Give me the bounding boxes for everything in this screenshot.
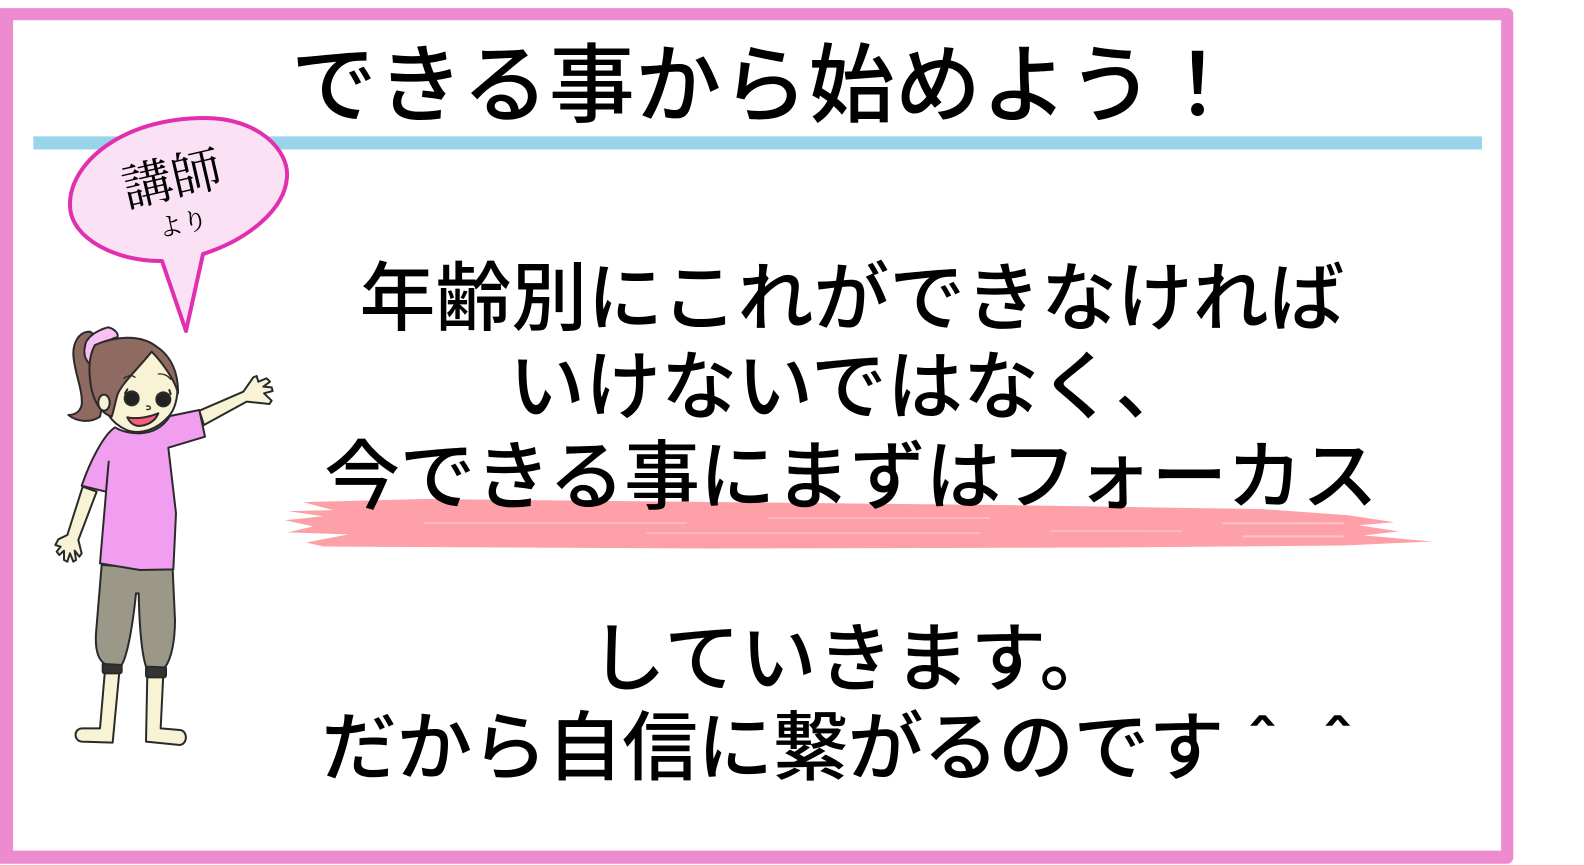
speech bubble: from the instructor <box>70 118 287 331</box>
illustration: knee bands <box>103 663 166 677</box>
illustration: hair <box>89 338 178 417</box>
speech bubble: from the instructor: より <box>156 207 210 243</box>
message line 4: していきます。 <box>590 617 1115 702</box>
brush stroke highlight <box>285 499 1432 549</box>
title underline bar <box>33 136 1482 150</box>
speech bubble: from the instructor: 講師 <box>117 141 227 218</box>
illustration: mouth <box>127 413 158 426</box>
main message <box>321 256 1378 804</box>
illustration: ear <box>98 395 110 411</box>
message line 5: ＾＾ <box>1224 714 1375 804</box>
title: できる事から始めよう！ <box>291 38 1241 134</box>
illustration: face <box>103 350 178 432</box>
illustration: ponytail and scrunchie <box>68 327 118 421</box>
illustration: eyes and lashes <box>125 389 171 406</box>
message line 3: 今できる事にまずはフォーカス <box>324 435 1378 520</box>
illustration: legs <box>76 670 186 745</box>
message line 1: 年齢別にこれができなければ <box>360 256 1345 341</box>
illustration: t-shirt <box>82 410 205 570</box>
illustration: woman pointing <box>55 327 273 745</box>
message line 5: だから自信に繋がるのです <box>321 706 1224 791</box>
illustration: eyebrows <box>124 374 171 379</box>
message line 2: いけないではなく、 <box>509 345 1191 430</box>
illustration: arms <box>55 376 273 562</box>
illustration: trousers <box>96 565 175 667</box>
illustration: nose <box>147 406 150 410</box>
